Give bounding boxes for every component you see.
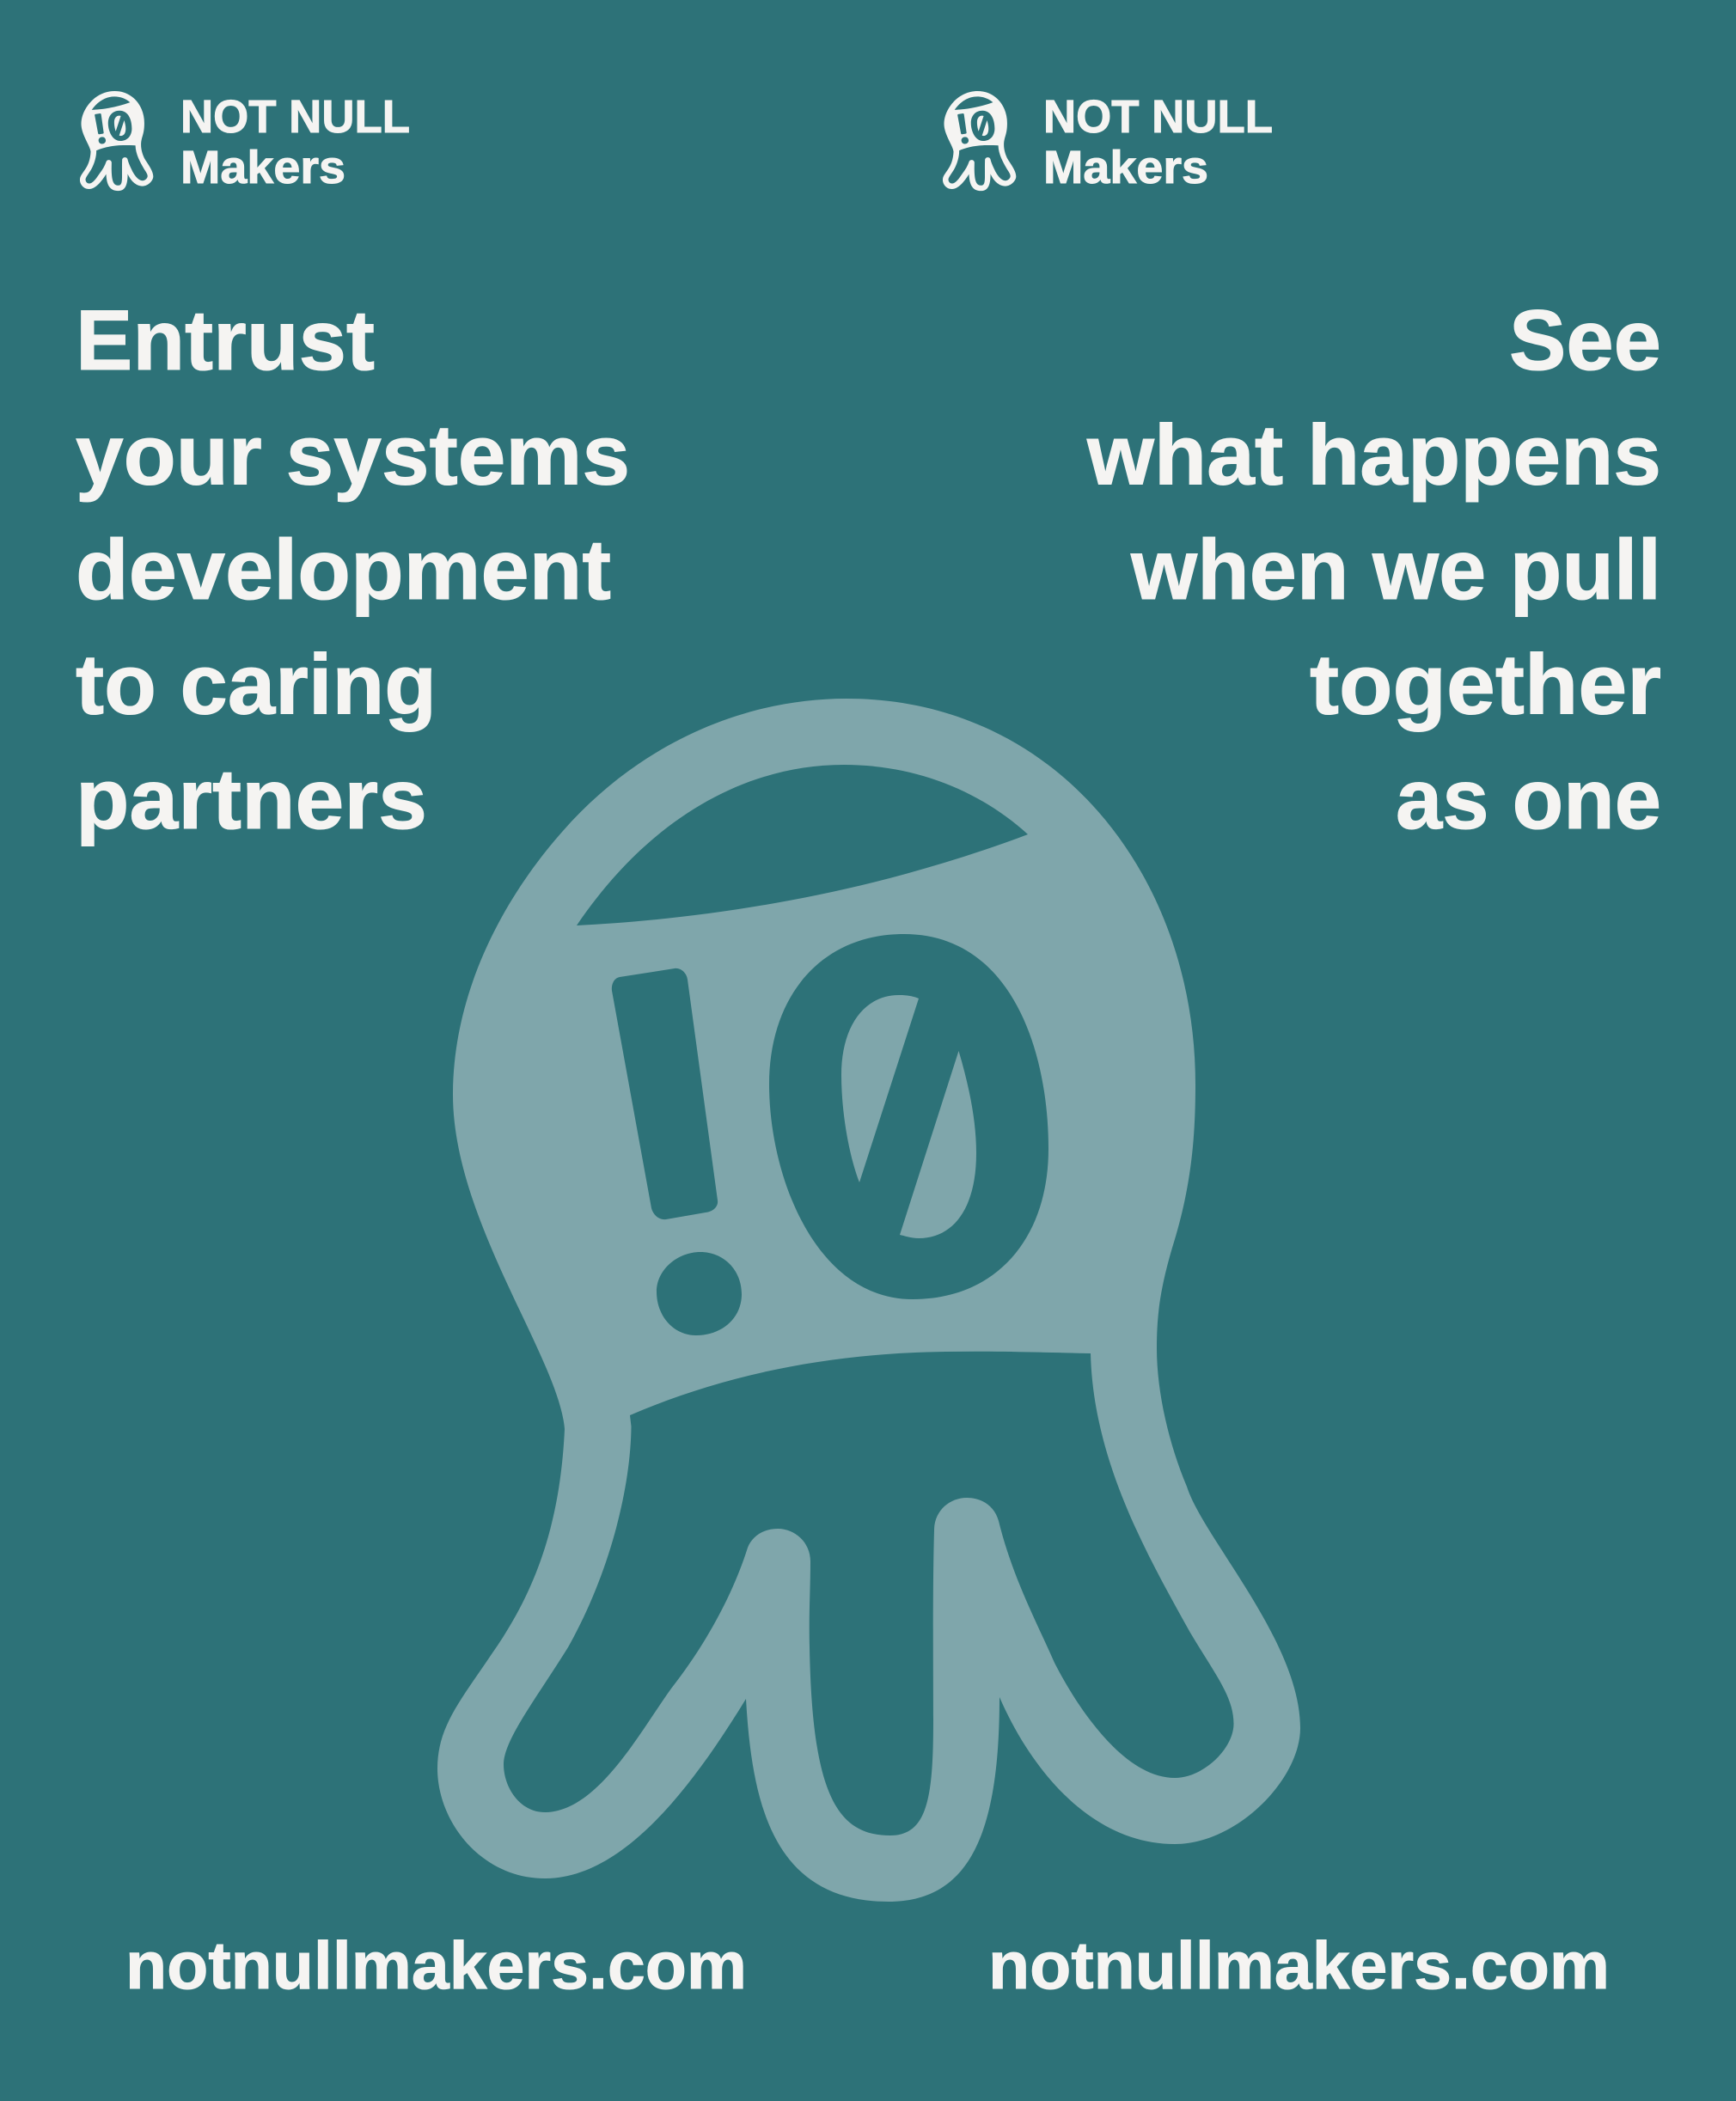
heading: right text block: what happens: [1086, 407, 1661, 502]
heading: right text block: [1086, 292, 1661, 846]
logo: right: [943, 91, 1273, 193]
logo text left: Makers: Makers: [180, 142, 345, 193]
heading: left text block: partners: [76, 751, 427, 846]
logo text right: Makers: Makers: [1043, 142, 1208, 193]
heading: right text block: See: [1509, 292, 1661, 388]
heading: left text block: your systems: [76, 407, 630, 502]
heading: left text block: to caring: [76, 636, 437, 732]
heading: right text block: when we pull: [1130, 522, 1661, 617]
logo text left: NOT NULL: NOT NULL: [180, 91, 410, 143]
website url: left: notnullmakers.com: [125, 1927, 747, 2003]
mascot: large octopus: [437, 699, 1300, 1902]
logo text right: NOT NULL: NOT NULL: [1043, 91, 1273, 143]
heading: right text block: together: [1310, 636, 1661, 732]
heading: left text block: [76, 292, 630, 846]
icon: octopus left: [80, 91, 153, 191]
icon: octopus right: [943, 91, 1016, 191]
heading: left text block: development: [76, 522, 611, 617]
mascot body outline: [437, 699, 1300, 1902]
mascot slashed zero: [769, 934, 1048, 1299]
logo: left: [80, 91, 410, 193]
heading: left text block: Entrust: [76, 292, 375, 388]
heading: right text block: as one: [1396, 751, 1661, 846]
mascot exclamation mark: [612, 968, 742, 1335]
website url: right: notnullmakers.com: [988, 1927, 1610, 2003]
mascot visor: [577, 765, 1028, 925]
